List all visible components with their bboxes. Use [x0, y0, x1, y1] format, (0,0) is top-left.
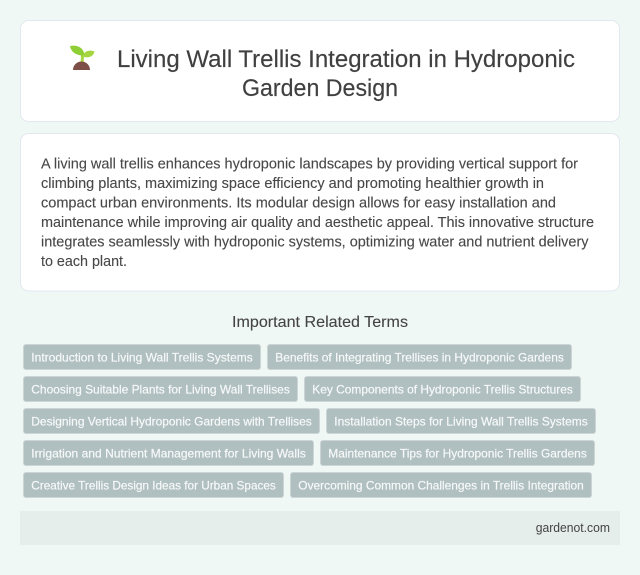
tag: overcoming challenges: Overcoming Common Challenges in Trellis Integration	[298, 479, 584, 493]
tag: introduction	[24, 344, 260, 370]
tag: installation steps	[326, 408, 596, 434]
tag: benefits	[268, 344, 572, 370]
tag: choosing plants	[24, 376, 298, 402]
panel: description: A living wall trellis enhances hydroponic landscapes by providing vertical support for	[41, 156, 578, 172]
tag: choosing plants: Choosing Suitable Plants for Living Wall Trellises	[31, 383, 290, 397]
tag: installation steps: Installation Steps for Living Wall Trellis Systems	[334, 415, 588, 429]
tag: maintenance tips	[320, 440, 594, 466]
tag: creative ideas	[24, 472, 284, 498]
footer: gardenot.com	[536, 521, 610, 535]
title text: Living Wall Trellis Integration in Hydroponic	[117, 46, 575, 73]
title text	[117, 46, 575, 102]
panel: related term tags	[24, 344, 596, 498]
tag: irrigation	[24, 440, 314, 466]
panel: description: to each plant.	[41, 254, 127, 270]
panel: description	[20, 134, 620, 291]
panel: title header	[20, 20, 620, 122]
panel: description: integrates seamlessly with hydroponic systems, optimizing water and nutrient delivery	[41, 234, 589, 250]
tag: maintenance tips: Maintenance Tips for Hydroponic Trellis Gardens	[328, 447, 587, 461]
tag: designing gardens: Designing Vertical Hydroponic Gardens with Trellises	[31, 415, 312, 429]
tag: benefits: Benefits of Integrating Trellises in Hydroponic Gardens	[275, 351, 564, 365]
tag: introduction: Introduction to Living Wall Trellis Systems	[31, 351, 253, 365]
panel: description: compact urban environments. Its modular design allows for easy installation and	[41, 195, 556, 211]
heading: important related terms: Important Related Terms	[232, 314, 408, 331]
tag: key components	[304, 376, 580, 402]
tag: designing gardens	[24, 408, 320, 434]
tag: creative ideas: Creative Trellis Design Ideas for Urban Spaces	[31, 479, 276, 493]
panel: description: climbing plants, maximizing space efficiency and promoting healthier growth in	[41, 176, 544, 192]
tag: irrigation: Irrigation and Nutrient Management for Living Walls	[31, 447, 306, 461]
tag: key components: Key Components of Hydroponic Trellis Structures	[312, 383, 573, 397]
title text: Garden Design	[242, 75, 398, 102]
footer	[20, 511, 620, 545]
icon: sprout	[70, 46, 94, 70]
tag: overcoming challenges	[290, 472, 592, 498]
panel: description: maintenance while improving air quality and aesthetic appeal. This innovative structure	[41, 215, 594, 231]
